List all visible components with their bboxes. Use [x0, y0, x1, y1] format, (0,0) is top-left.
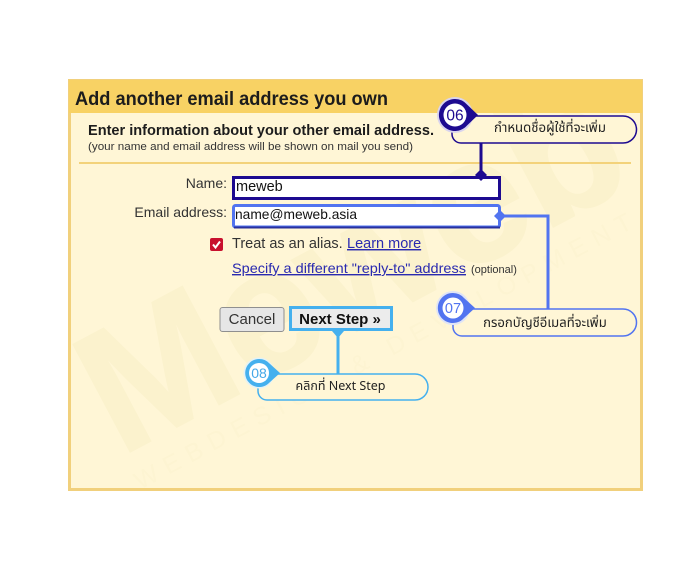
arrow: connector 07 [494, 210, 548, 309]
arrow: connector 06 [475, 143, 487, 181]
alias checkbox [210, 238, 223, 251]
callout 07: 07 [445, 301, 461, 317]
name input: meweb [236, 179, 283, 195]
callout 06: กำหนดชื่อผู้ใช้ที่จะเพิ่ม [494, 118, 606, 138]
watermark [72, 113, 620, 452]
watermark: Meweb [46, 42, 656, 491]
sub-heading: Enter information about your other email address. [88, 123, 434, 139]
reply-to link: (optional) [471, 264, 517, 276]
callout 08: 08 [251, 365, 267, 381]
email label: Email address: [134, 204, 227, 220]
callout 07 [436, 291, 636, 336]
name input [234, 178, 500, 198]
watermark: WEBDESIGN & DEVELOPMENT [130, 204, 644, 495]
arrow: connector 08 [332, 331, 344, 375]
callout 08: คลิกที่ Next Step [296, 377, 385, 396]
panel: email dialog [68, 79, 643, 491]
reply-to link: Specify a different "reply-to" address [232, 260, 466, 276]
callout 06 [437, 97, 636, 143]
callout 06: 06 [446, 108, 464, 124]
callout 08 [244, 358, 428, 400]
helper note: (your name and email address will be shown on mail you send) [88, 141, 413, 153]
alias text and link: Treat as an alias. [232, 236, 343, 252]
cancel button [220, 308, 284, 332]
alias text and link: Learn more [347, 236, 421, 252]
heading: Add another email address you own [75, 89, 388, 110]
callout 07: กรอกบัญชีอีเมลที่จะเพิ่ม [483, 313, 607, 333]
name label: Name: [186, 175, 227, 191]
alias text and link [232, 236, 421, 252]
email input: name@meweb.asia [235, 206, 357, 222]
cancel button: Cancel [229, 311, 275, 328]
email input [234, 206, 500, 228]
next step button [290, 308, 392, 330]
next step button: Next Step » [299, 311, 381, 328]
